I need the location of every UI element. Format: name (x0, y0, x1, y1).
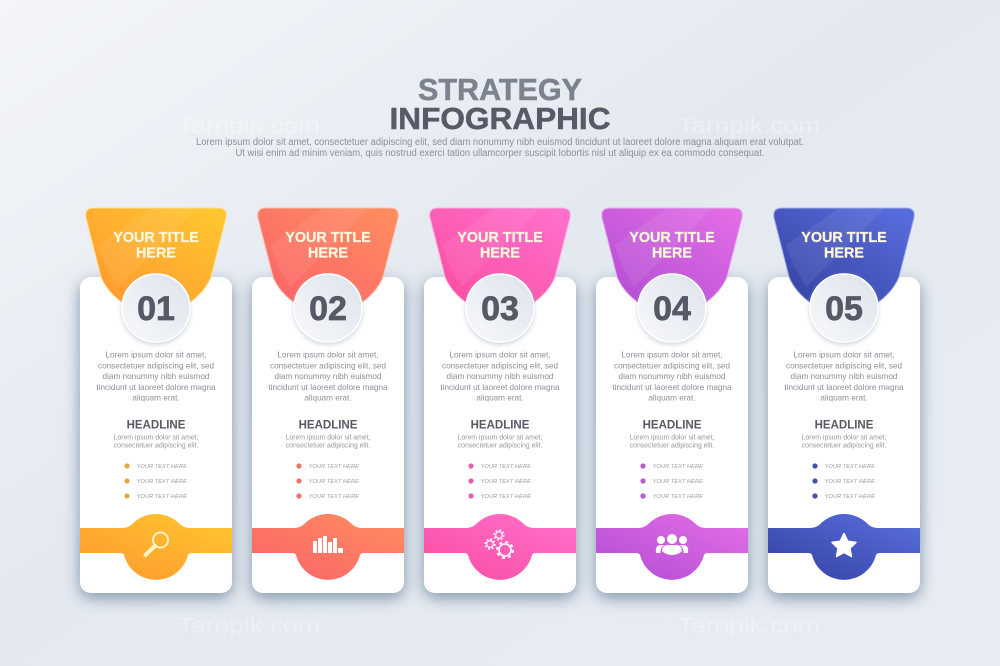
tab title: HERE (824, 246, 864, 262)
body text: aliquam erat. (132, 394, 180, 402)
headline (113, 420, 199, 450)
bullet list: YOUR TEXT HERE (308, 464, 359, 470)
body text: aliquam erat. (648, 394, 696, 402)
headline: Lorem ipsum dolor sit amet, (629, 434, 715, 442)
icon: gears (485, 530, 513, 558)
bullet list: YOUR TEXT HERE (652, 464, 703, 470)
panel: step 02 (252, 208, 404, 593)
body text (612, 350, 732, 402)
body text: diam nonummy nibh euismod (447, 372, 554, 381)
tab title (113, 230, 199, 262)
headline (457, 420, 543, 450)
icon: people (656, 534, 688, 555)
tab title: YOUR TITLE (285, 230, 371, 246)
icon: magnifier (146, 532, 168, 555)
title: INFOGRAPHIC (390, 101, 610, 136)
title tab (774, 208, 914, 304)
tab title (457, 230, 543, 262)
body text: aliquam erat. (476, 394, 524, 402)
bullet list: YOUR TEXT HERE (480, 494, 531, 500)
card (424, 277, 576, 593)
title: STRATEGY (418, 72, 582, 107)
card (80, 277, 232, 593)
number badge (466, 274, 534, 342)
headline (629, 420, 715, 450)
headline: HEADLINE (299, 420, 358, 432)
body text: Lorem ipsum dolor sit amet, (105, 350, 207, 360)
number badge: 05 (825, 290, 863, 328)
icon: star (832, 534, 856, 556)
intro text: Lorem ipsum dolor sit amet, consectetuer adipiscing elit, sed diam nonummy nibh euismod tincidunt ut laoreet dolore magna aliquam erat volutpat. (196, 137, 804, 148)
title tab (430, 208, 570, 304)
title tab (602, 208, 742, 304)
body text: diam nonummy nibh euismod (619, 372, 726, 381)
headline: consectetuer adipiscing elit. (630, 442, 714, 450)
body text: Lorem ipsum dolor sit amet, (277, 350, 379, 360)
body text: aliquam erat. (820, 394, 868, 402)
number badge (294, 274, 362, 342)
ribbon (252, 514, 404, 580)
headline: HEADLINE (815, 420, 874, 432)
body text: consectetuer adipiscing elit, sed (786, 362, 902, 370)
headline: consectetuer adipiscing elit. (802, 442, 886, 450)
number badge (638, 274, 706, 342)
headline: consectetuer adipiscing elit. (458, 442, 542, 450)
panel: step 03 (424, 208, 576, 593)
body text (268, 350, 388, 402)
bullet list: YOUR TEXT HERE (652, 494, 703, 500)
body text: Lorem ipsum dolor sit amet, (621, 350, 723, 360)
headline (285, 420, 371, 450)
headline: HEADLINE (471, 420, 530, 432)
bullet list: YOUR TEXT HERE (480, 479, 531, 485)
body text: consectetuer adipiscing elit, sed (98, 362, 214, 370)
bullet list: YOUR TEXT HERE (136, 464, 187, 470)
body text (784, 350, 904, 402)
bullet list: YOUR TEXT HERE (824, 464, 875, 470)
body text (440, 350, 560, 402)
tab title (801, 230, 887, 262)
bullet list: YOUR TEXT HERE (308, 494, 359, 500)
ribbon (424, 514, 576, 580)
body text: consectetuer adipiscing elit, sed (614, 362, 730, 370)
headline: Lorem ipsum dolor sit amet, (113, 434, 199, 442)
card (596, 277, 748, 593)
number badge (122, 274, 190, 342)
bullet list: YOUR TEXT HERE (652, 479, 703, 485)
body text: diam nonummy nibh euismod (791, 372, 898, 381)
watermarks: Tarnpik.com (178, 613, 320, 638)
panel: step 01 (80, 208, 232, 593)
body text: Lorem ipsum dolor sit amet, (449, 350, 551, 360)
tab title (285, 230, 371, 262)
bullet list (468, 463, 531, 500)
number badge: 04 (653, 290, 691, 328)
title tab (86, 208, 226, 304)
intro text (196, 137, 804, 159)
ribbon (80, 514, 232, 580)
number badge (810, 274, 878, 342)
tab title (629, 230, 715, 262)
body text: diam nonummy nibh euismod (103, 372, 210, 381)
watermarks: Tarnpik.com (678, 113, 820, 138)
card (768, 277, 920, 593)
body text: Lorem ipsum dolor sit amet, (793, 350, 895, 360)
tab title: HERE (308, 246, 348, 262)
body text: tincidunt ut laoreet dolore magna (784, 383, 904, 392)
bullet list: YOUR TEXT HERE (136, 479, 187, 485)
bullet list: YOUR TEXT HERE (824, 494, 875, 500)
title tab (258, 208, 398, 304)
watermarks: Tarnpik.com (678, 613, 820, 638)
headline: Lorem ipsum dolor sit amet, (457, 434, 543, 442)
tab title: HERE (652, 246, 692, 262)
ribbon (768, 514, 920, 580)
body text: diam nonummy nibh euismod (275, 372, 382, 381)
headline: consectetuer adipiscing elit. (114, 442, 198, 450)
ribbon (596, 514, 748, 580)
body text: tincidunt ut laoreet dolore magna (440, 383, 560, 392)
tab title: YOUR TITLE (629, 230, 715, 246)
bullet list: YOUR TEXT HERE (824, 479, 875, 485)
bullet list: YOUR TEXT HERE (136, 494, 187, 500)
panel: step 05 (768, 208, 920, 593)
bullet list: YOUR TEXT HERE (480, 464, 531, 470)
headline: HEADLINE (643, 420, 702, 432)
bullet list: YOUR TEXT HERE (308, 479, 359, 485)
card (252, 277, 404, 593)
body text: consectetuer adipiscing elit, sed (270, 362, 386, 370)
watermarks: Tarnpik.com (178, 113, 320, 138)
body text: aliquam erat. (304, 394, 352, 402)
tab title: HERE (480, 246, 520, 262)
tab title: YOUR TITLE (457, 230, 543, 246)
number badge: 01 (137, 290, 175, 328)
panel: step 04 (596, 208, 748, 593)
tab title: YOUR TITLE (801, 230, 887, 246)
number badge: 02 (309, 290, 347, 328)
watermarks (178, 113, 820, 638)
bullet list (640, 463, 703, 500)
body text: consectetuer adipiscing elit, sed (442, 362, 558, 370)
headline (801, 420, 887, 450)
bullet list (812, 463, 875, 500)
headline: HEADLINE (127, 420, 186, 432)
number badge: 03 (481, 290, 519, 328)
icon: bar chart (313, 536, 343, 553)
title (390, 72, 610, 136)
headline: Lorem ipsum dolor sit amet, (801, 434, 887, 442)
body text: tincidunt ut laoreet dolore magna (96, 383, 216, 392)
bullet list (124, 463, 187, 500)
headline: Lorem ipsum dolor sit amet, (285, 434, 371, 442)
bullet list (296, 463, 359, 500)
headline: consectetuer adipiscing elit. (286, 442, 370, 450)
body text (96, 350, 216, 402)
body text: tincidunt ut laoreet dolore magna (612, 383, 732, 392)
tab title: YOUR TITLE (113, 230, 199, 246)
intro text: Ut wisi enim ad minim veniam, quis nostrud exerci tation ullamcorper suscipit lobortis nisl ut aliquip ex ea commodo consequat. (236, 148, 764, 159)
body text: tincidunt ut laoreet dolore magna (268, 383, 388, 392)
tab title: HERE (136, 246, 176, 262)
